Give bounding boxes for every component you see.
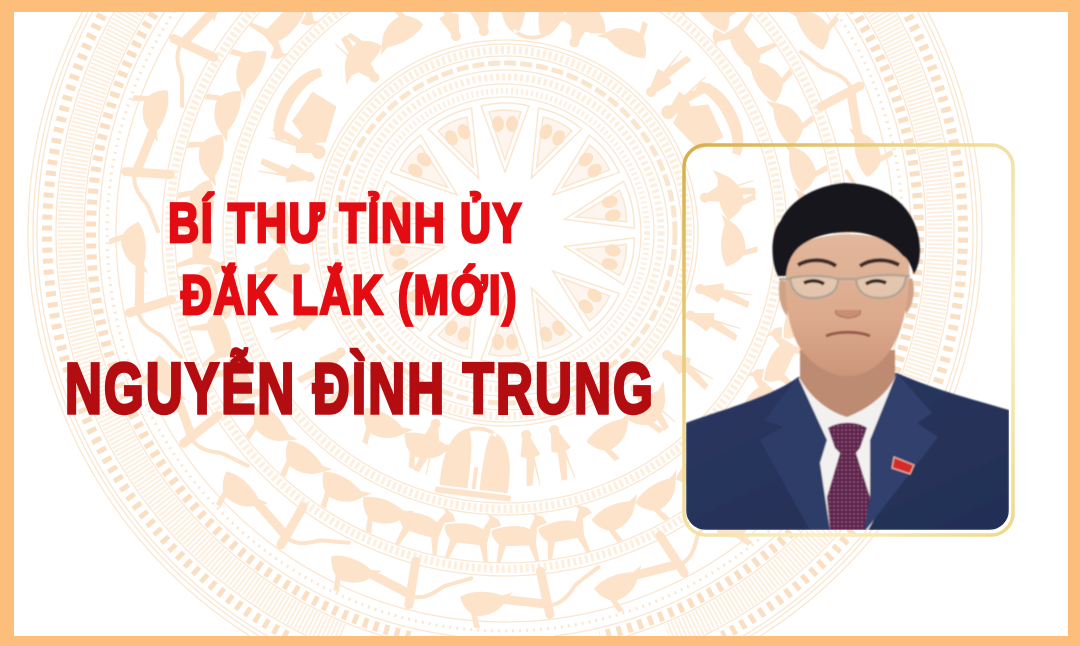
lapel badge bbox=[892, 457, 914, 474]
gold photo frame bbox=[684, 145, 1013, 535]
ears bbox=[779, 278, 914, 316]
hair bbox=[772, 183, 920, 276]
drum ring: stilt houses, boats and people bbox=[252, 12, 758, 502]
nose and mouth bbox=[836, 310, 860, 318]
left lapel bbox=[760, 377, 830, 530]
shirt collar bbox=[799, 373, 897, 530]
eyebrows bbox=[798, 260, 899, 266]
heading: title line 2: ĐẮK LẮK (MỚI) bbox=[181, 263, 518, 326]
necktie bbox=[827, 423, 870, 530]
drum ring: deer and birds bbox=[177, 12, 828, 562]
suit jacket bbox=[686, 373, 1009, 530]
drum ring: herons and small birds bbox=[109, 0, 901, 630]
neck bbox=[800, 350, 895, 422]
right lapel bbox=[864, 373, 938, 530]
drum center: sun star bbox=[373, 103, 637, 363]
heading: title line 1: BÍ THƯ TỈNH ỦY bbox=[168, 191, 523, 254]
eyes bbox=[804, 281, 886, 284]
portrait photo bbox=[686, 183, 1009, 530]
glasses bbox=[779, 275, 910, 298]
face bbox=[786, 234, 909, 376]
heading: person name: NGUYỄN ĐÌNH TRUNG bbox=[65, 349, 655, 429]
